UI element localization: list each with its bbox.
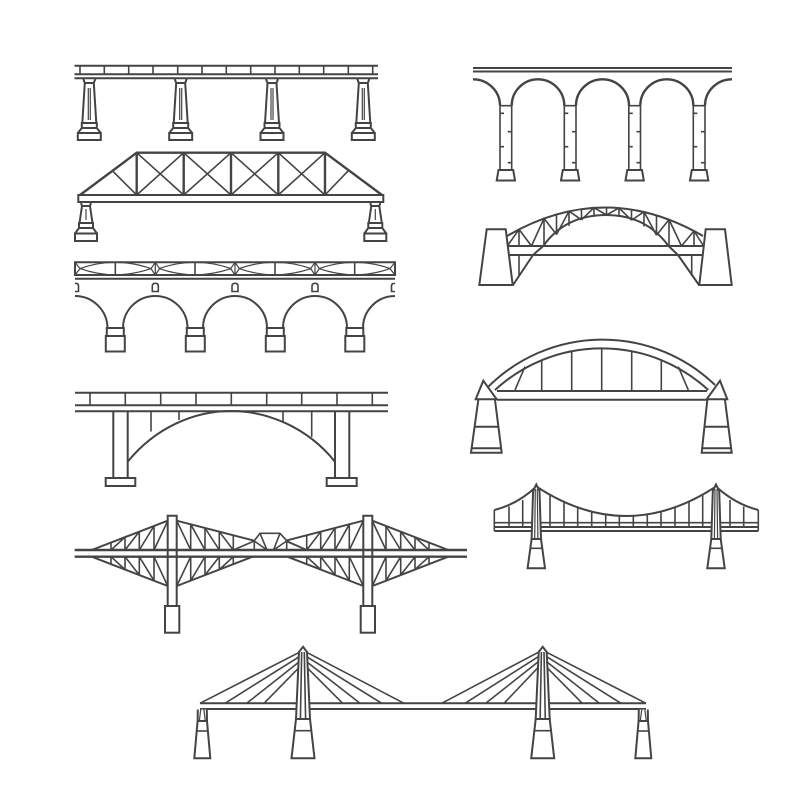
towers (528, 484, 725, 568)
arch lattice (508, 207, 703, 276)
towers (479, 229, 732, 285)
hangers (494, 494, 758, 531)
bridge: through arch truss between towers (479, 207, 732, 285)
left pier (471, 381, 502, 453)
deck (494, 522, 758, 524)
arches (473, 79, 732, 106)
truss frame (80, 153, 382, 195)
bridge: tied arch bridge (471, 340, 732, 453)
spandrel windows (75, 283, 395, 292)
deck (75, 550, 467, 557)
main and side cables (494, 486, 758, 516)
bridge: deck arch bridge (75, 393, 388, 486)
piers (78, 79, 375, 140)
piers and footings (106, 411, 357, 486)
piers (106, 328, 364, 352)
deck (473, 68, 732, 72)
outer and inner arch (488, 340, 715, 390)
deck (200, 703, 646, 709)
bridge: cantilever truss bridge (75, 516, 467, 633)
deck (74, 66, 378, 78)
right pier (702, 381, 732, 453)
spandrel posts (151, 411, 312, 437)
arch (128, 411, 335, 462)
bridge: girder viaduct on four piers (74, 66, 378, 140)
truss verticals and diagonals (137, 153, 325, 195)
deck panels (90, 393, 372, 405)
end piers (194, 709, 651, 758)
stay cables (200, 652, 646, 703)
bridge: stone arch bridge with lattice parapet (75, 262, 395, 352)
deck (78, 195, 383, 202)
left and right cantilever towers (92, 516, 448, 633)
bridge: suspension bridge (494, 484, 758, 568)
lens curves and node diamonds (75, 262, 395, 275)
deck (497, 391, 707, 400)
bridge: aqueduct arches (473, 68, 732, 180)
parapet lattice (115, 262, 355, 275)
deck (75, 393, 388, 411)
deck panels (80, 66, 373, 74)
piers (75, 203, 386, 241)
centre span truss (254, 533, 307, 550)
bridge: cable-stayed bridge (194, 647, 651, 758)
hangers (515, 348, 688, 391)
cross bracing (113, 153, 348, 195)
bridge: truss bridge (75, 153, 386, 241)
main towers (292, 647, 554, 758)
arches (75, 296, 395, 328)
arch chords (507, 208, 703, 285)
parapet (75, 262, 395, 279)
columns (497, 106, 708, 180)
deck (508, 246, 704, 255)
